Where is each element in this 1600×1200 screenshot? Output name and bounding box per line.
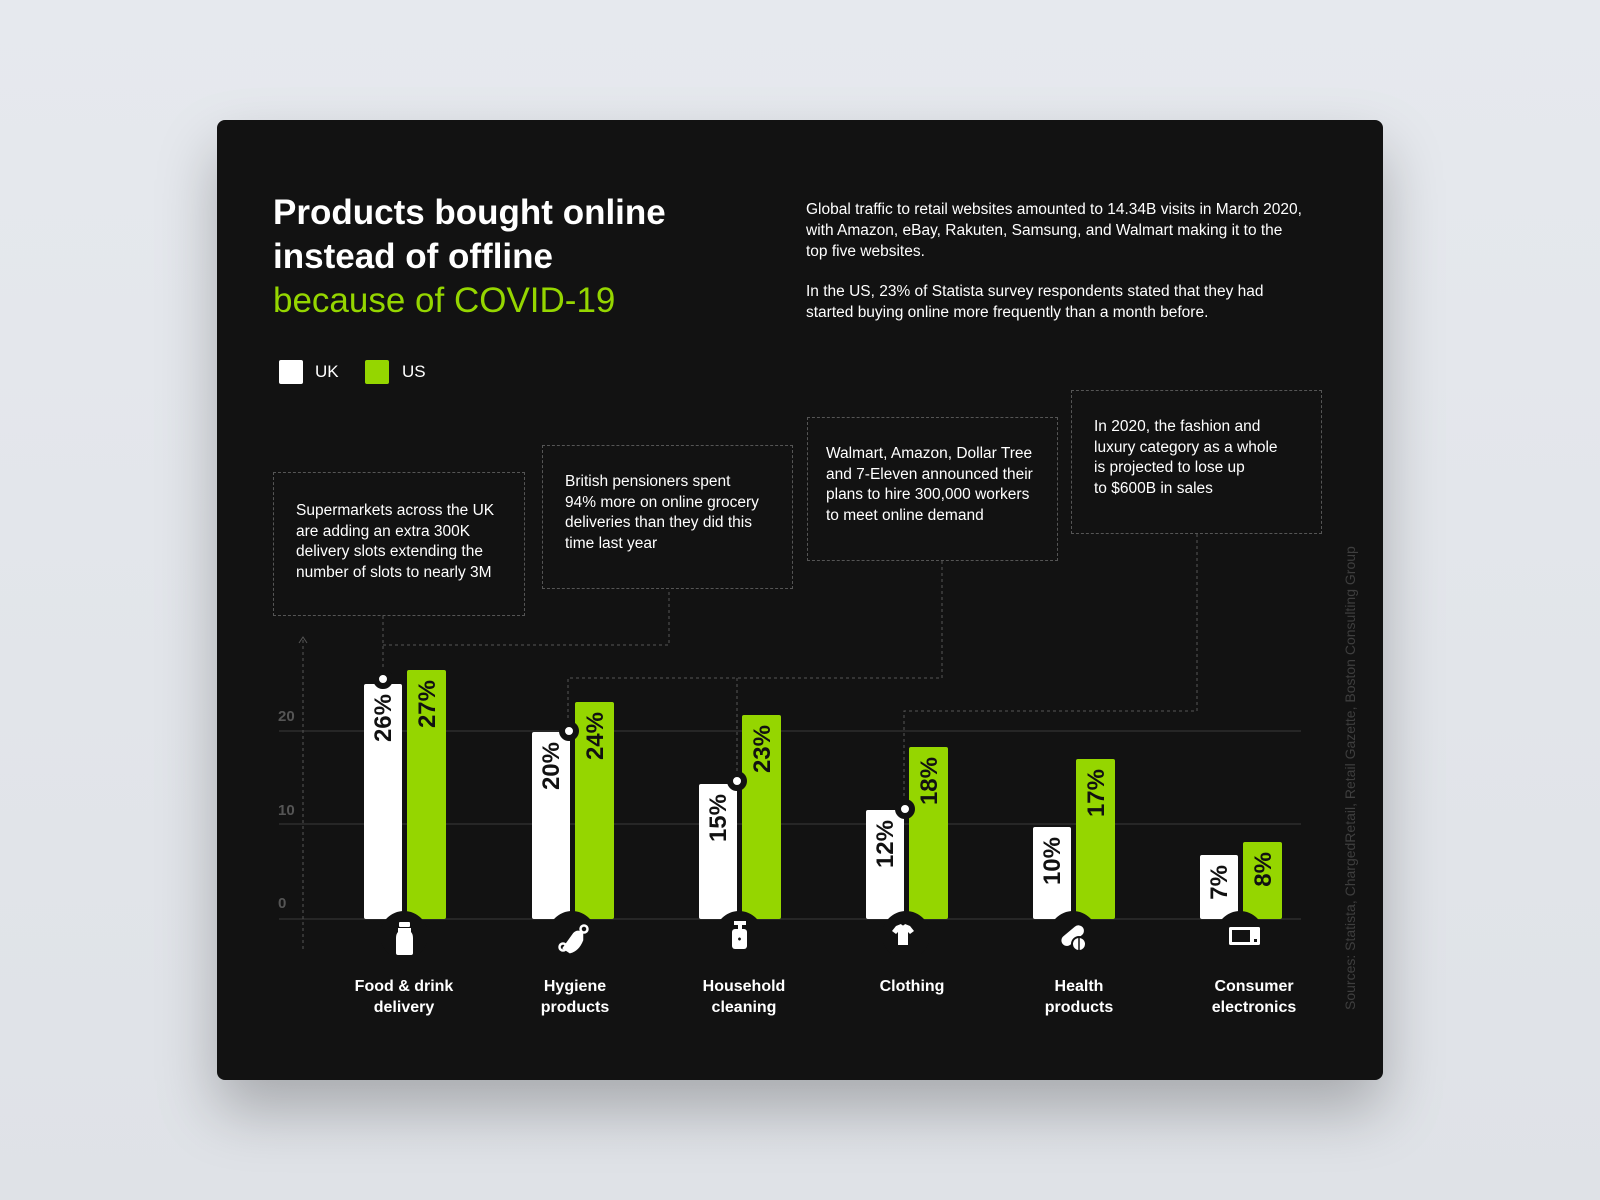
icon: t-shirt <box>892 924 914 945</box>
intro text: top five websites. <box>806 243 925 260</box>
category labels: Hygiene <box>544 978 606 995</box>
value labels: 17% <box>1083 769 1110 817</box>
callout: supermarkets: are adding an extra 300K <box>296 522 470 540</box>
title: Products bought online <box>273 193 666 232</box>
callout: fashion <box>1071 390 1322 534</box>
callout: supermarkets <box>273 472 525 616</box>
callout: fashion: is projected to lose up <box>1094 459 1245 476</box>
value labels: 24% <box>582 712 609 760</box>
callout: supermarkets: Supermarkets across the UK <box>296 502 494 519</box>
bar chart: 20 <box>278 708 295 725</box>
callout: pensioners: British pensioners spent <box>565 473 730 490</box>
callout: walmart: to meet online demand <box>826 506 984 524</box>
callout: pensioners <box>542 445 793 589</box>
value labels: 15% <box>705 794 732 842</box>
category labels: products <box>541 999 609 1016</box>
value labels: 26% <box>370 694 397 742</box>
callout: pensioners: time last year <box>565 534 657 552</box>
intro text: with Amazon, eBay, Rakuten, Samsung, and Walmart making it to the <box>806 222 1282 239</box>
title: instead of offline <box>273 237 553 276</box>
value labels: 23% <box>749 725 776 773</box>
icon: microwave <box>1229 927 1260 945</box>
legend <box>279 360 426 384</box>
category labels <box>355 978 1296 1016</box>
category labels: Consumer <box>1214 978 1294 995</box>
value labels: 10% <box>1039 837 1066 885</box>
title <box>273 193 666 320</box>
callout: walmart: Walmart, Amazon, Dollar Tree <box>826 445 1032 462</box>
callout: walmart: plans to hire 300,000 workers <box>826 486 1029 503</box>
intro text: In the US, 23% of Statista survey respondents stated that they had <box>806 283 1264 300</box>
category labels: Health <box>1055 978 1103 995</box>
value labels: 8% <box>1250 852 1277 887</box>
category labels: Household <box>703 978 785 995</box>
icon: spray <box>732 921 747 949</box>
callout: walmart <box>807 417 1058 561</box>
category labels: products <box>1045 999 1113 1016</box>
value labels: 20% <box>538 742 565 790</box>
category labels: Food & drink <box>355 978 453 995</box>
card <box>217 120 1383 1080</box>
category labels: cleaning <box>712 999 776 1016</box>
callout: walmart: and 7-Eleven announced their <box>826 466 1033 482</box>
bars <box>364 670 1282 919</box>
title: because of COVID-19 <box>273 281 615 320</box>
legend: UK <box>315 362 339 381</box>
callout: pensioners: deliveries than they did this <box>565 514 752 531</box>
sources: Sources: Statista, ChargedRetail, Retail Gazette, Boston Consulting Group <box>1342 546 1358 1010</box>
callout: pensioners: 94% more on online grocery <box>565 494 759 510</box>
category labels: electronics <box>1212 999 1296 1016</box>
value labels: 7% <box>1206 865 1233 900</box>
category labels: Clothing <box>880 978 944 995</box>
icon: mask <box>560 926 588 952</box>
value labels <box>370 680 1277 900</box>
intro text: started buying online more frequently than a month before. <box>806 304 1208 321</box>
value labels: 12% <box>872 820 899 868</box>
value labels: 18% <box>916 757 943 805</box>
intro text: Global traffic to retail websites amounted to 14.34B visits in March 2020, <box>806 201 1302 218</box>
callout: fashion: luxury category as a whole <box>1094 438 1278 456</box>
category labels: delivery <box>374 999 434 1016</box>
connector dots <box>376 672 912 816</box>
callout: supermarkets: delivery slots extending the <box>296 543 483 560</box>
icon: bottle <box>396 922 413 955</box>
callout: fashion: In 2020, the fashion and <box>1094 418 1260 435</box>
value labels: 27% <box>414 680 441 728</box>
icon circles <box>380 911 1264 959</box>
legend: US <box>402 362 426 381</box>
bar chart: 10 <box>278 802 295 819</box>
callout: supermarkets: number of slots to nearly 3M <box>296 564 492 580</box>
callout: fashion: to $600B in sales <box>1094 480 1213 496</box>
bar chart: 0 <box>278 895 286 912</box>
icon: pills <box>1059 923 1086 951</box>
intro text <box>806 201 1302 321</box>
